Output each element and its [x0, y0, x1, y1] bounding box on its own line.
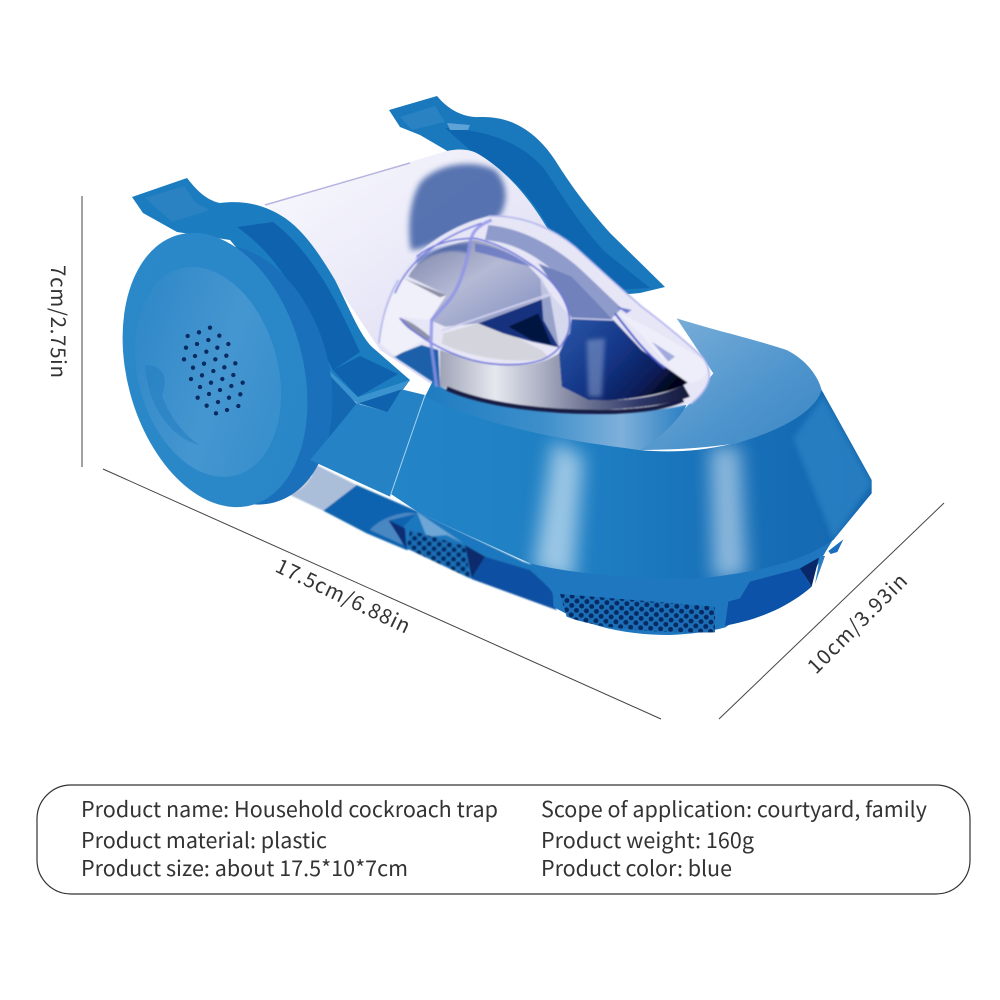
pale plate — [442, 322, 548, 361]
label: width: 10cm/3.93in — [799, 565, 913, 679]
infographic canvas — [36, 96, 971, 895]
label: height: 7cm/2.75in — [45, 265, 75, 378]
roller — [290, 475, 311, 495]
right dark cavity — [725, 568, 812, 626]
front strap — [132, 178, 410, 404]
tray shadow under left lobe — [393, 345, 440, 387]
label: length: 17.5cm/6.88in — [271, 549, 416, 639]
far mesh sliver — [815, 556, 825, 584]
silver bucket — [440, 350, 690, 410]
pale rail strip — [417, 512, 463, 543]
spec panel — [37, 785, 970, 894]
right pale shell — [617, 312, 707, 383]
neck connector — [310, 389, 425, 497]
spec: product name: Product name: Household cockroach trap — [81, 793, 498, 824]
spec: product weight: Product weight: 160g — [541, 824, 754, 855]
upper arc — [395, 223, 482, 293]
dark triangle — [388, 520, 407, 549]
spec: product color: Product color: blue — [541, 852, 732, 883]
tray under dome — [425, 380, 687, 450]
rib line — [442, 293, 552, 331]
panel outline — [37, 785, 970, 894]
pale underside — [290, 462, 357, 511]
far navy corner — [800, 558, 819, 587]
navy streak — [587, 338, 605, 397]
end cap disc — [94, 212, 360, 528]
right mesh vent — [560, 594, 715, 632]
underside centre and right — [530, 533, 837, 635]
centre dark cavity — [472, 557, 557, 610]
disc side wall — [120, 224, 360, 526]
navy corner — [465, 545, 485, 578]
spec: product material: Product material: plastic — [81, 824, 327, 855]
dome assembly — [379, 216, 709, 413]
dome outer outline — [379, 216, 709, 403]
body and tray — [390, 318, 872, 583]
dimension line: height — [81, 196, 83, 467]
left mesh vent — [407, 530, 470, 578]
pale reflection — [370, 513, 418, 545]
right interior tint — [538, 263, 613, 320]
dimension line: length — [103, 469, 661, 719]
dome base fill — [379, 216, 709, 413]
dark underside plate — [323, 485, 440, 550]
dimension line: width — [719, 503, 944, 719]
navy edge line — [615, 313, 665, 368]
handle fins — [399, 278, 447, 341]
backing behind neck — [290, 355, 358, 470]
spec: scope of application: Scope of application: courtyard, family — [541, 793, 927, 824]
dark rim — [447, 388, 683, 412]
underside neck frame — [290, 462, 570, 610]
clear cylinder — [265, 149, 600, 390]
disc vent holes — [182, 325, 245, 415]
body side band — [390, 390, 872, 583]
rear strap — [389, 96, 665, 300]
upper band tint — [485, 225, 622, 318]
dark wedge — [478, 296, 559, 347]
tip tab — [828, 539, 843, 554]
spec: product size: Product size: about 17.5*10*7cm — [81, 852, 408, 883]
disc face — [94, 212, 336, 528]
product photo: cockroach trap — [94, 96, 872, 635]
left lower rail — [403, 512, 570, 600]
left lobe — [380, 278, 445, 357]
inner cup interior — [408, 240, 550, 327]
cup rim line — [400, 238, 570, 365]
central skirt — [530, 533, 837, 635]
wedge pale pane — [540, 275, 572, 347]
body top surface — [640, 318, 822, 450]
navy interior — [559, 318, 688, 401]
disc inner circle — [113, 251, 303, 493]
pane horizontal — [572, 318, 613, 320]
vertical rib — [431, 220, 492, 387]
